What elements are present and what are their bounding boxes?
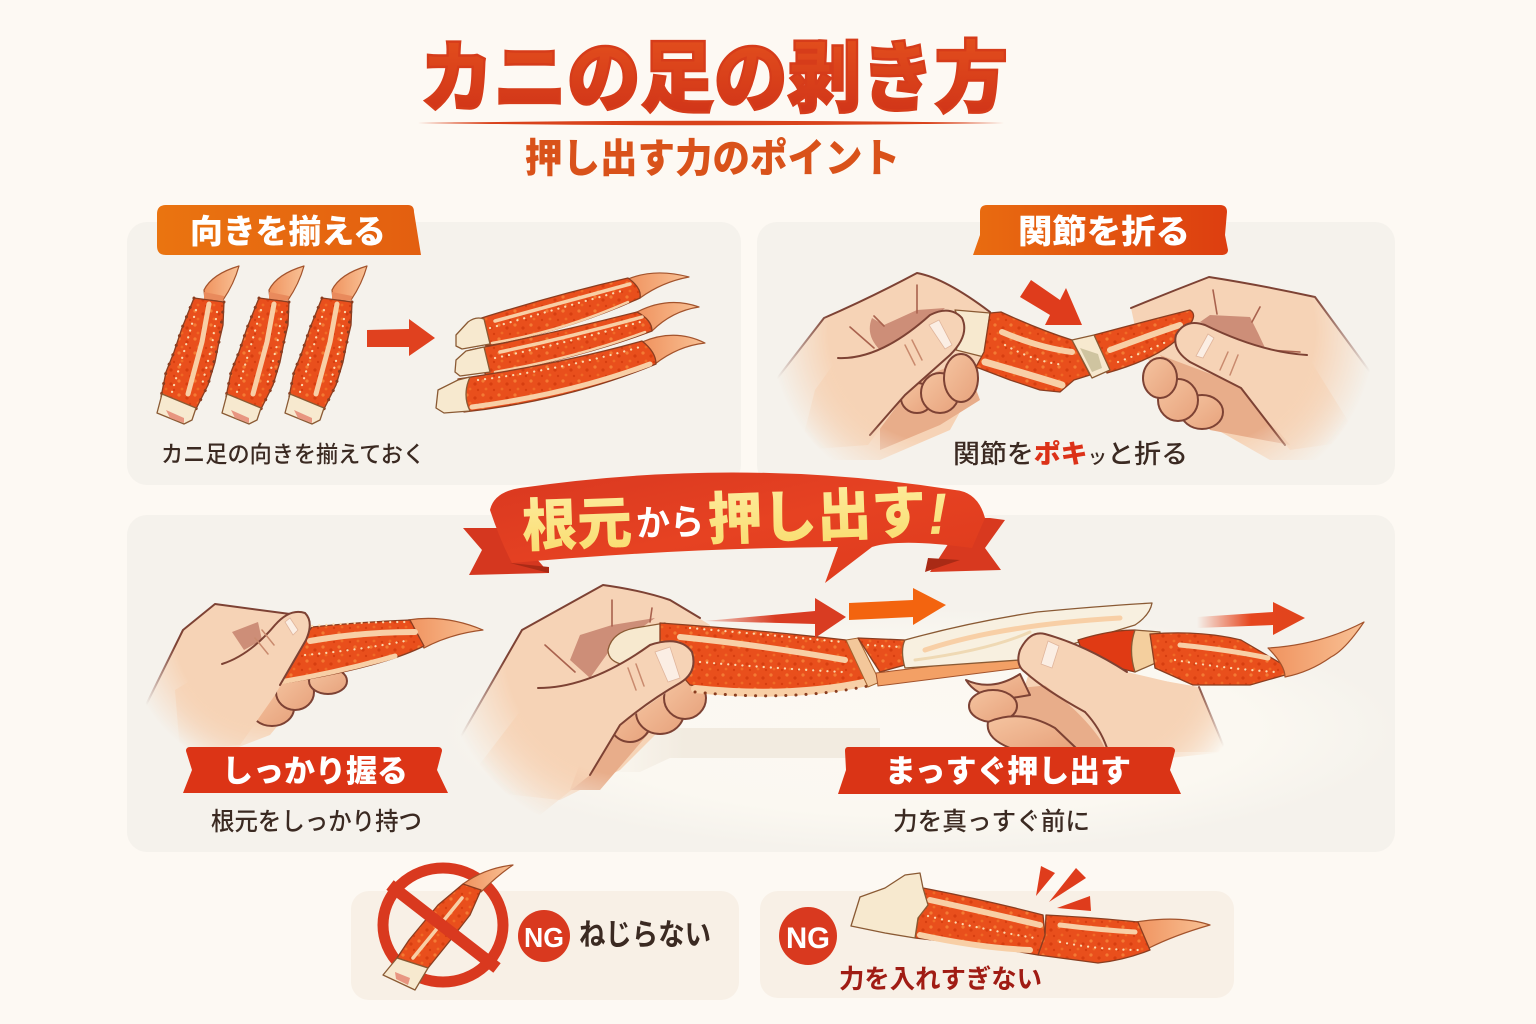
crab leg (383, 865, 513, 990)
step heading ribbon (157, 205, 421, 255)
main title: カニの足の剥き方 (420, 34, 1008, 122)
title underline (418, 121, 1004, 125)
right ribbon tail (930, 518, 1005, 572)
arrow 1 (705, 598, 846, 638)
panel: push out from the base (127, 472, 1400, 852)
grip crab leg (278, 618, 483, 684)
grip ribbon (183, 747, 448, 793)
panel: NG too much force (760, 866, 1234, 998)
left hand (772, 273, 990, 460)
grip ribbon: しっかり握る (222, 754, 408, 789)
step heading ribbon: 関節を折る (1018, 213, 1190, 250)
light area behind leg (440, 608, 1400, 852)
panel background (127, 515, 1395, 852)
right hand fingers (1143, 358, 1223, 429)
grip thumb (175, 612, 310, 750)
push ribbon (838, 747, 1181, 794)
grip fingers (250, 668, 347, 726)
main left thumb (486, 640, 694, 810)
arrow right (367, 319, 435, 356)
infographic canvas (146, 36, 1370, 1000)
panel background (351, 891, 739, 1000)
three unaligned crab legs (157, 266, 367, 424)
prohibition circle (383, 868, 503, 982)
panel background (127, 222, 741, 485)
panel: break the joint (777, 205, 1370, 466)
banner text: ! (927, 481, 948, 547)
bottom leg (436, 335, 705, 413)
faint background band (600, 728, 880, 772)
panel background (757, 222, 1395, 485)
panel background (760, 891, 1234, 998)
broken crab leg (851, 873, 1210, 963)
right thumb (1175, 323, 1360, 450)
caption: 力を入れすぎない (839, 964, 1042, 994)
left ribbon tail (463, 528, 549, 575)
step heading ribbon: 向きを揃える (190, 213, 386, 250)
left thumb (800, 311, 964, 450)
banner text: から (635, 501, 705, 544)
NG badge (779, 907, 837, 965)
aligned crab legs (436, 273, 705, 413)
caption: カニ足の向きを揃えておく (161, 441, 425, 467)
caption: 関節をポキッと折る (953, 439, 1188, 469)
left hand fingers (901, 354, 978, 413)
NG badge (518, 910, 570, 962)
banner text: 根元 (521, 491, 633, 559)
main banner (463, 472, 1005, 583)
caption: ねじらない (579, 919, 711, 952)
push fingers (608, 677, 706, 742)
crab leg being snapped (955, 310, 1194, 392)
top leg (456, 273, 689, 349)
push caption: 力を真っすぐ前に (893, 808, 1090, 836)
banner text (521, 480, 948, 561)
NG badge: NG (786, 922, 830, 955)
middle leg (455, 303, 699, 376)
grip hand with leg (146, 604, 483, 760)
panel: NG do not twist (351, 865, 739, 1000)
grip caption: 根元をしっかり持つ (211, 808, 422, 836)
right hand under leg (966, 633, 1226, 760)
arrow pointing to joint (1020, 280, 1082, 325)
panel: align direction (127, 205, 741, 485)
arrow 2 (849, 588, 946, 625)
arrow 3 (1197, 602, 1305, 635)
NG badge: NG (524, 922, 564, 953)
right hand (1131, 277, 1376, 460)
long crab leg (608, 603, 1364, 696)
prohibition slash (390, 885, 497, 968)
ribbon body (490, 472, 985, 583)
subtitle: 押し出す力のポイント (525, 137, 900, 181)
push ribbon: まっすぐ押し出す (885, 754, 1131, 789)
push direction arrows (705, 588, 1305, 638)
main push hand (456, 585, 710, 800)
title block (418, 34, 1008, 181)
impact burst (1036, 866, 1091, 911)
banner text: 押し出す (707, 481, 927, 553)
right hand fingers (966, 674, 1076, 748)
step heading ribbon (973, 205, 1228, 255)
fold shadows (510, 558, 960, 573)
